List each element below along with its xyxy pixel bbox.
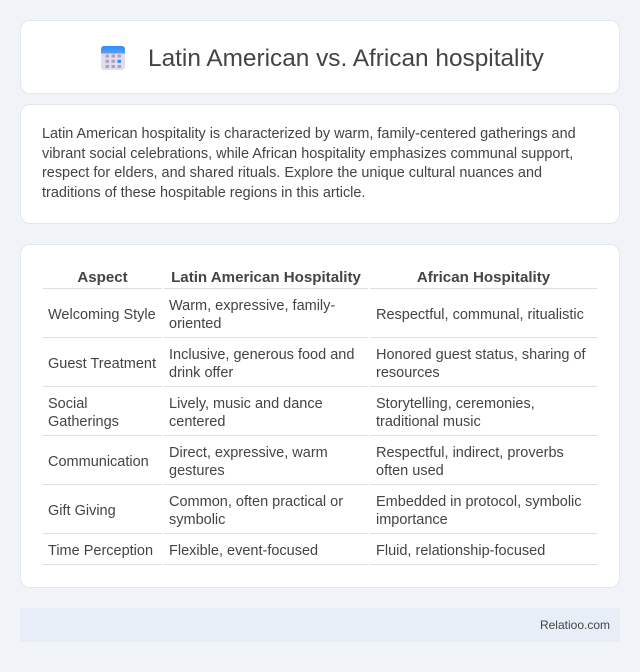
row: Social Gatherings: Gatherings (48, 414, 119, 430)
row: Communication: Communication (48, 454, 149, 470)
row: Communication (48, 445, 564, 479)
row: Guest Treatment: resources (376, 365, 440, 381)
footer bar (20, 608, 620, 642)
row: Welcoming Style: Welcoming Style (48, 307, 156, 323)
row: Gift Giving (48, 494, 582, 528)
row: Welcoming Style: Warm, expressive, family- (169, 298, 335, 314)
header: Aspect: Aspect (77, 269, 128, 286)
header: Latin American Hospitality: Latin American Hospitality (171, 269, 361, 286)
row: Gift Giving: Gift Giving (48, 503, 116, 519)
footer credit: Relatioo.com (540, 618, 610, 632)
row: Guest Treatment: drink offer (169, 365, 233, 381)
row: Gift Giving: Embedded in protocol, symbolic (376, 494, 582, 510)
title: Latin American vs. African hospitality (148, 45, 544, 72)
intro text panel (20, 104, 620, 224)
row: Guest Treatment: Honored guest status, sharing of (376, 347, 586, 363)
row: Welcoming Style (48, 298, 584, 332)
row: Social Gatherings: traditional music (376, 414, 481, 430)
row: Guest Treatment (48, 347, 586, 381)
row: Guest Treatment: Guest Treatment (48, 356, 156, 372)
row: Social Gatherings (48, 396, 535, 430)
intro line 2: vibrant social celebrations, while African hospitality emphasizes communal support, (42, 146, 573, 162)
intro line 3: respect for elders, and shared rituals. Explore the unique cultural nuances and (42, 165, 542, 181)
intro line 4: traditions of these hospitable regions in this article. (42, 185, 365, 201)
row: Time Perception (48, 543, 545, 559)
intro line 1: Latin American hospitality is characterized by warm, family-centered gatherings and (42, 126, 576, 142)
row: Social Gatherings: Lively, music and dance (169, 396, 323, 412)
row: Communication: gestures (169, 463, 225, 479)
row: Gift Giving: symbolic (169, 512, 225, 528)
header: African Hospitality: African Hospitality (417, 269, 550, 286)
row: Communication: Direct, expressive, warm (169, 445, 328, 461)
row: Time Perception: Fluid, relationship-focused (376, 543, 545, 559)
row: Communication: Respectful, indirect, proverbs (376, 445, 564, 461)
comparison table panel (20, 244, 620, 588)
row: Gift Giving: Common, often practical or (169, 494, 343, 510)
header panel (20, 20, 620, 94)
row: Gift Giving: importance (376, 512, 448, 528)
row: Welcoming Style: oriented (169, 316, 221, 332)
row: Time Perception: Flexible, event-focused (169, 543, 318, 559)
row: Communication: often used (376, 463, 444, 479)
row: Social Gatherings: centered (169, 414, 225, 430)
row: Social Gatherings: Social (48, 396, 88, 412)
table (43, 269, 597, 565)
row: Welcoming Style: Respectful, communal, ritualistic (376, 307, 584, 323)
icon: calendar (101, 46, 125, 70)
row: Social Gatherings: Storytelling, ceremonies, (376, 396, 535, 412)
row: Guest Treatment: Inclusive, generous food and (169, 347, 354, 363)
row: Time Perception: Time Perception (48, 543, 153, 559)
